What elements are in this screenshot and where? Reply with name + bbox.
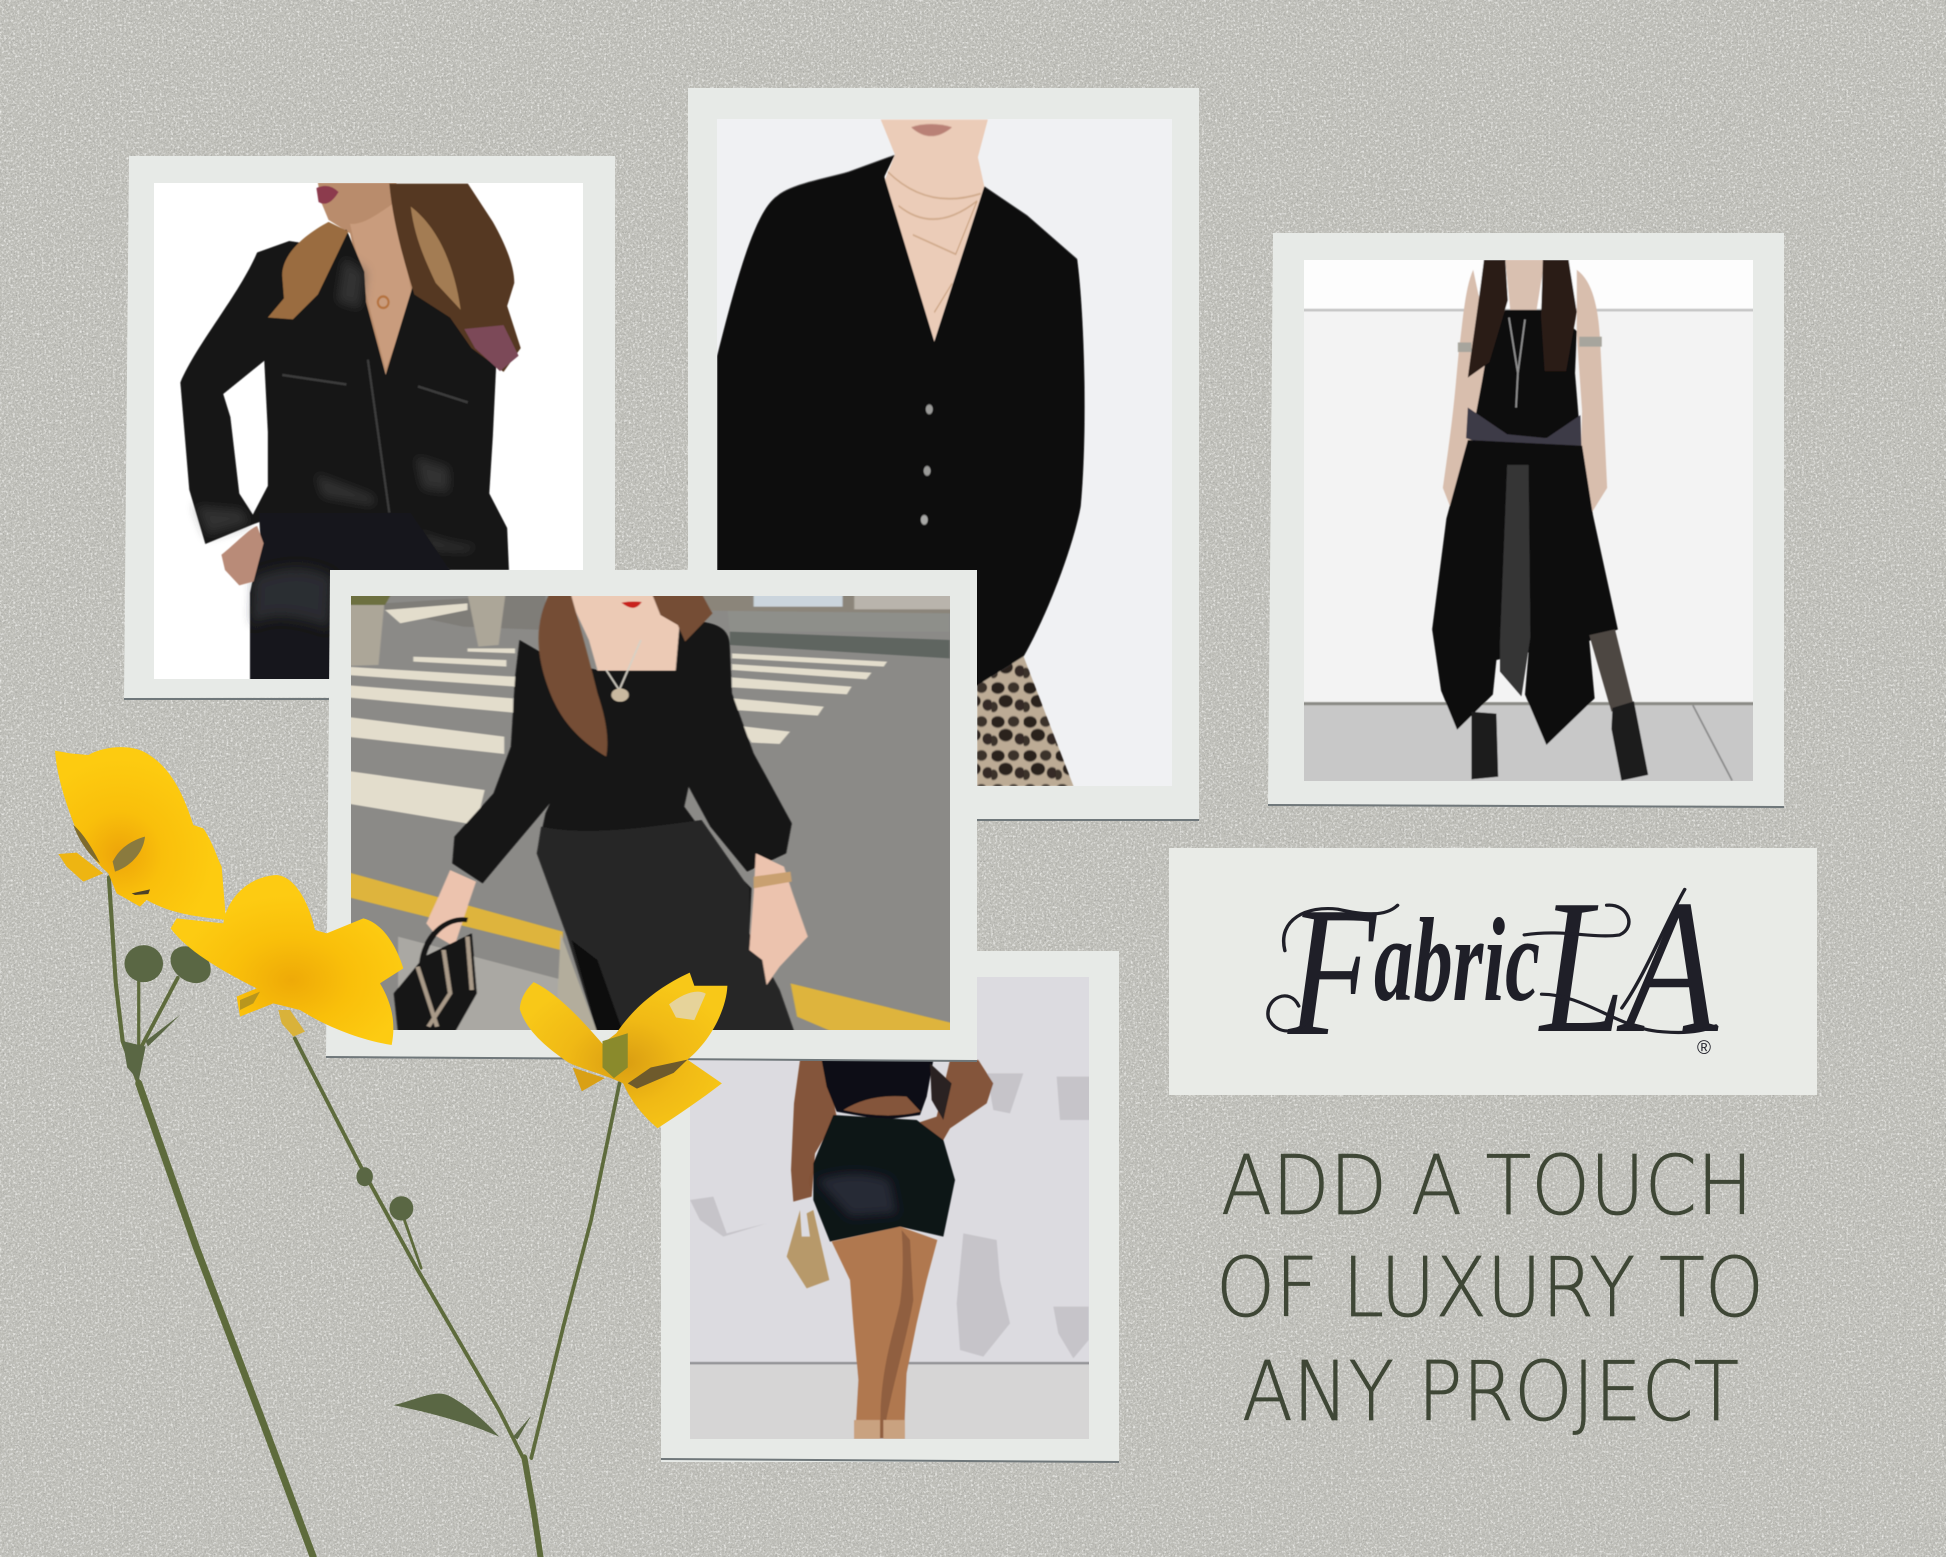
tagline: ANY PROJECT (1242, 1345, 1739, 1440)
panel: logo card (1169, 848, 1817, 1095)
panel: mini skirt photo (661, 951, 1119, 1462)
stems (109, 878, 619, 1557)
tagline: ADD A TOUCH (1221, 1139, 1753, 1234)
logo: FabricLA: LA (1538, 860, 1719, 1073)
yellow pressed flowers (55, 747, 727, 1557)
panel: velvet shirt photo (124, 156, 615, 699)
tagline: OF LUXURY TO (1216, 1241, 1764, 1336)
logo: FabricLA: F (1287, 869, 1378, 1075)
panel: street dress photo (326, 570, 977, 1061)
panel: black velvet blouse photo (688, 88, 1199, 820)
flower 3 (520, 973, 727, 1128)
panel: lace skirt dress photo (1268, 233, 1784, 807)
flower 1 (55, 747, 403, 1045)
logo: FabricLA: abric (1374, 893, 1540, 1026)
logo: FabricLA: ® (1697, 1038, 1711, 1059)
flower 2 (278, 1010, 305, 1037)
buds and leaves (123, 939, 531, 1439)
tagline (1216, 1139, 1764, 1440)
logo: FabricLA (1268, 860, 1719, 1075)
